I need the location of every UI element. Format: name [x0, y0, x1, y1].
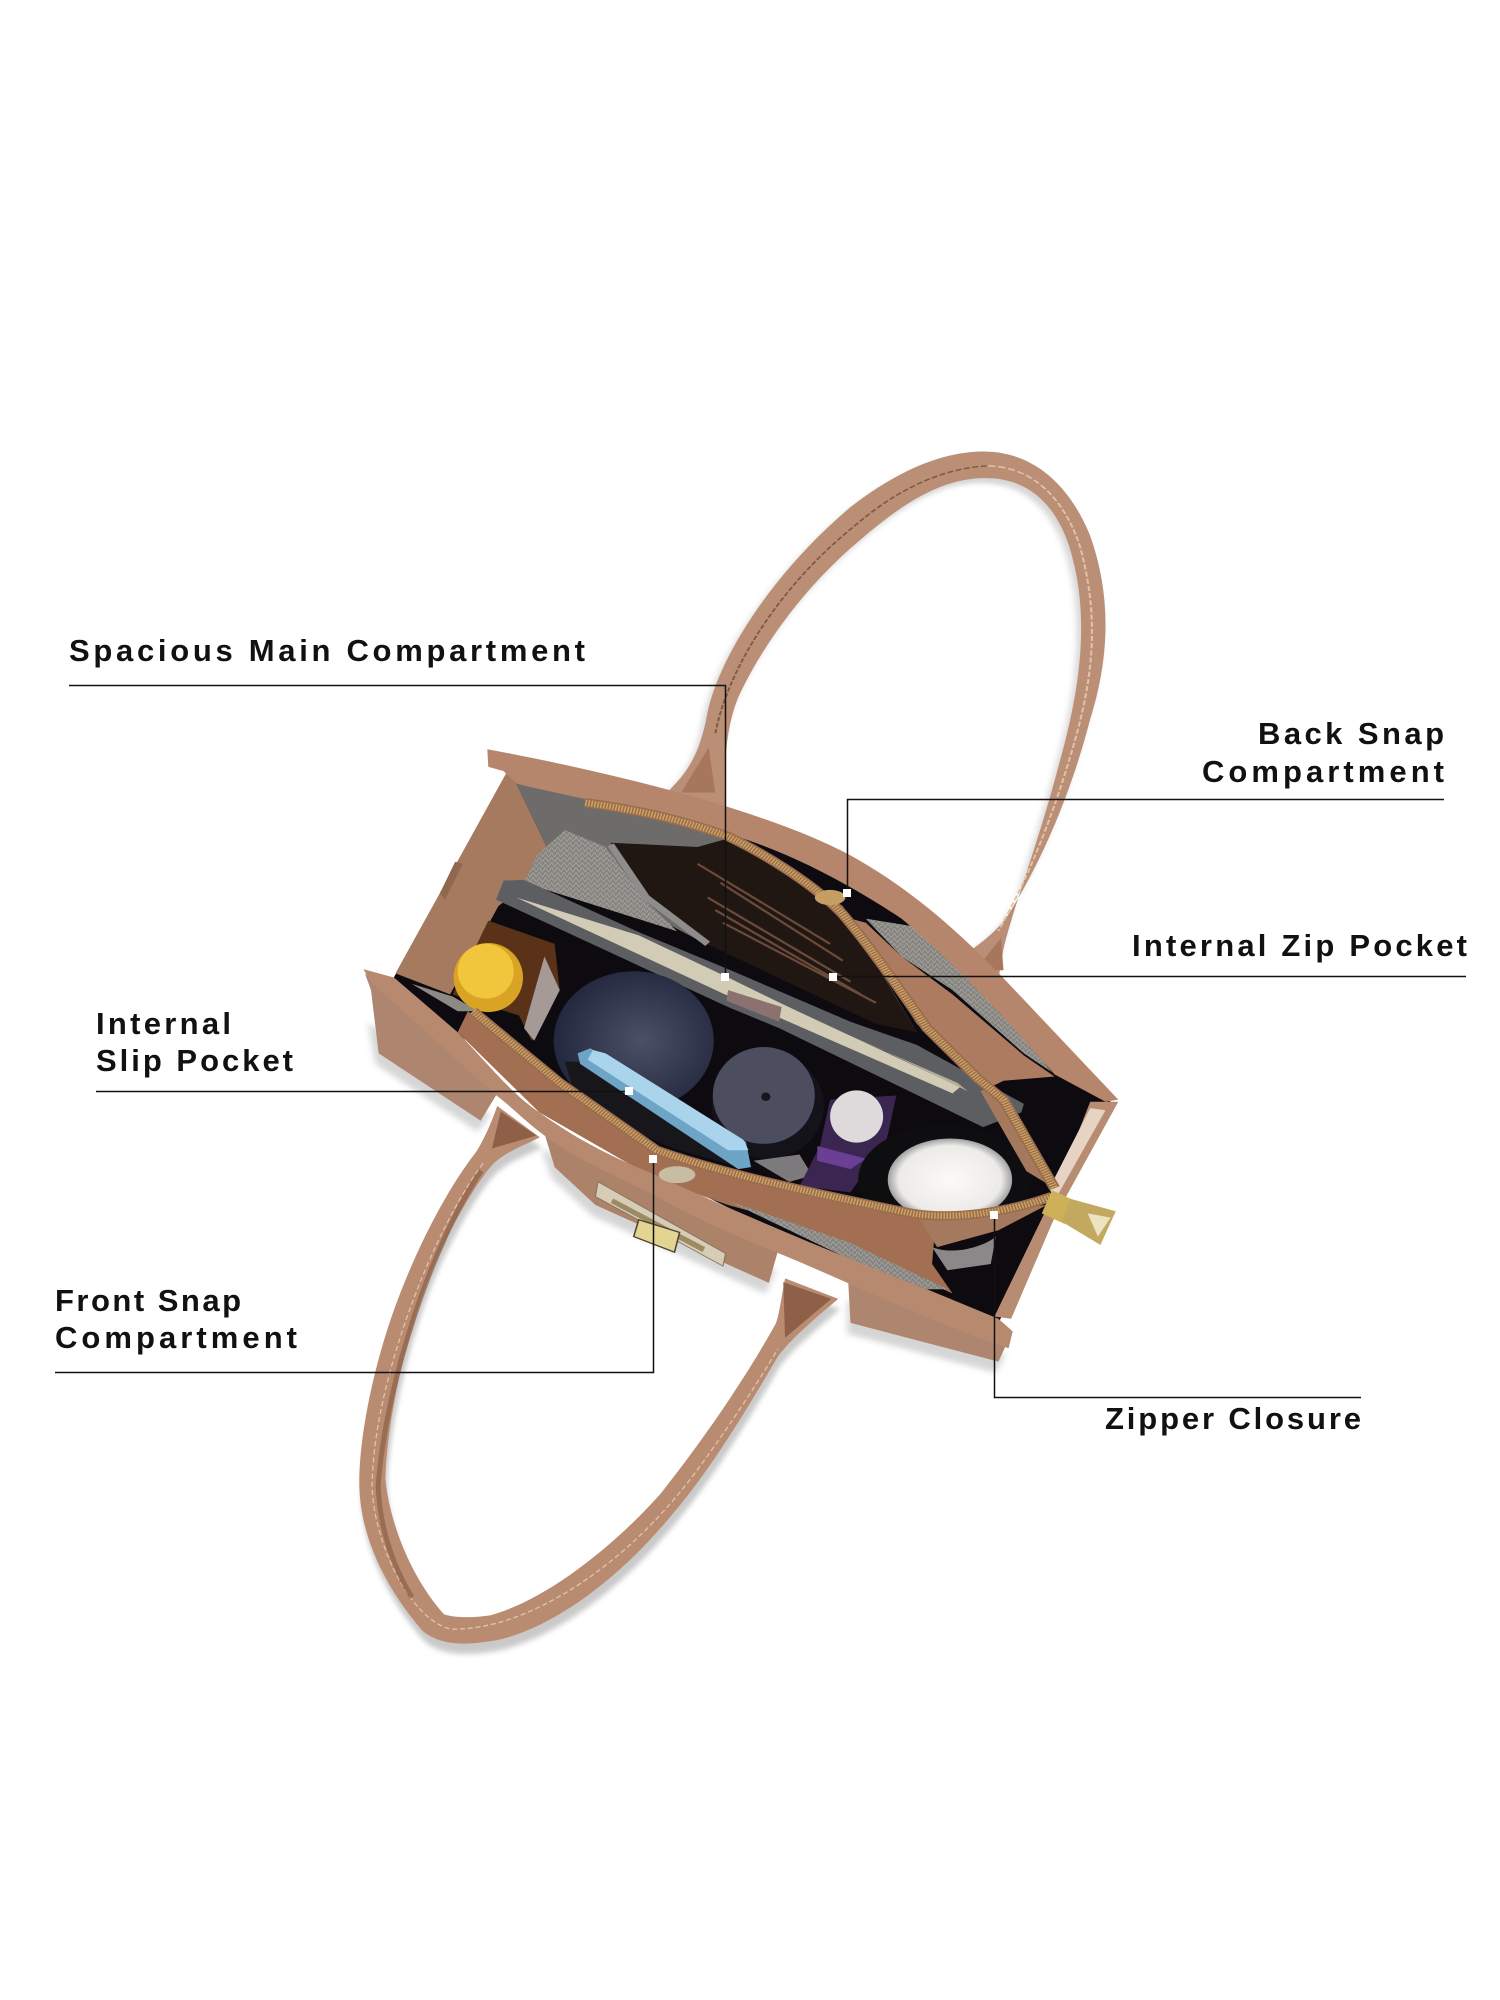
panel: left end wall: [395, 773, 555, 994]
panel: back rim: [487, 749, 1118, 1102]
panel shadows: [368, 1022, 1006, 1373]
wallet in back pocket: [611, 839, 917, 1032]
callout: internal slip pocket: [96, 1006, 633, 1095]
zipper slider: [1042, 1190, 1116, 1245]
gold snap front: [659, 1166, 695, 1183]
callout: internal slip pocket: Internal: [96, 1006, 231, 1041]
purple bottle: [799, 1090, 896, 1192]
callout: internal zip pocket: Internal Zip Pocket: [1132, 928, 1467, 963]
cup lid: [712, 1047, 824, 1182]
panel: back lining: [516, 784, 917, 1032]
panel: front rim: [363, 969, 1013, 1348]
herringbone sliver: [728, 1201, 947, 1289]
back zipper: [585, 803, 1055, 1188]
callout: zipper closure: [990, 1211, 1361, 1436]
folder tab: [727, 990, 782, 1022]
panel: front right: [848, 1277, 1009, 1362]
callout: internal zip pocket: [829, 928, 1467, 981]
lining grey strip: [412, 984, 478, 1011]
panel: front middle: [542, 1125, 779, 1283]
phone: [578, 1048, 751, 1169]
panel: front left: [365, 973, 499, 1121]
back flap: [850, 919, 1055, 1087]
interior base: [391, 775, 1111, 1323]
callout: front snap compartment: Front Snap: [55, 1283, 241, 1318]
callout: front snap compartment: Compartment: [55, 1320, 297, 1355]
top handle: [663, 451, 1106, 984]
callout: back snap compartment: Back Snap: [1258, 716, 1444, 751]
gold bottle: [453, 921, 560, 1041]
round cosmetic disc: [554, 971, 714, 1110]
grey document folder: [496, 880, 1024, 1127]
panel: right end wall: [994, 1102, 1118, 1319]
black pouch: [565, 1062, 738, 1167]
callout: front snap compartment: [55, 1155, 657, 1372]
callout: internal slip pocket: Slip Pocket: [96, 1043, 293, 1078]
bottom handle: [359, 1106, 840, 1654]
turn lock: [595, 1182, 726, 1266]
callout: back snap compartment: [843, 716, 1444, 897]
callout: spacious main compartment: [69, 633, 729, 981]
handbag body: [363, 749, 1118, 1373]
callout: back snap compartment: Compartment: [1202, 754, 1444, 789]
callout: zipper closure: Zipper Closure: [1105, 1401, 1361, 1436]
gold snap back: [815, 890, 845, 905]
handbag illustration: [359, 451, 1118, 1654]
large white jar: [858, 1125, 1032, 1270]
callout: spacious main compartment: Spacious Main Compartment: [69, 633, 585, 668]
front flap: [458, 1011, 953, 1293]
front zipper: [473, 1011, 1052, 1247]
